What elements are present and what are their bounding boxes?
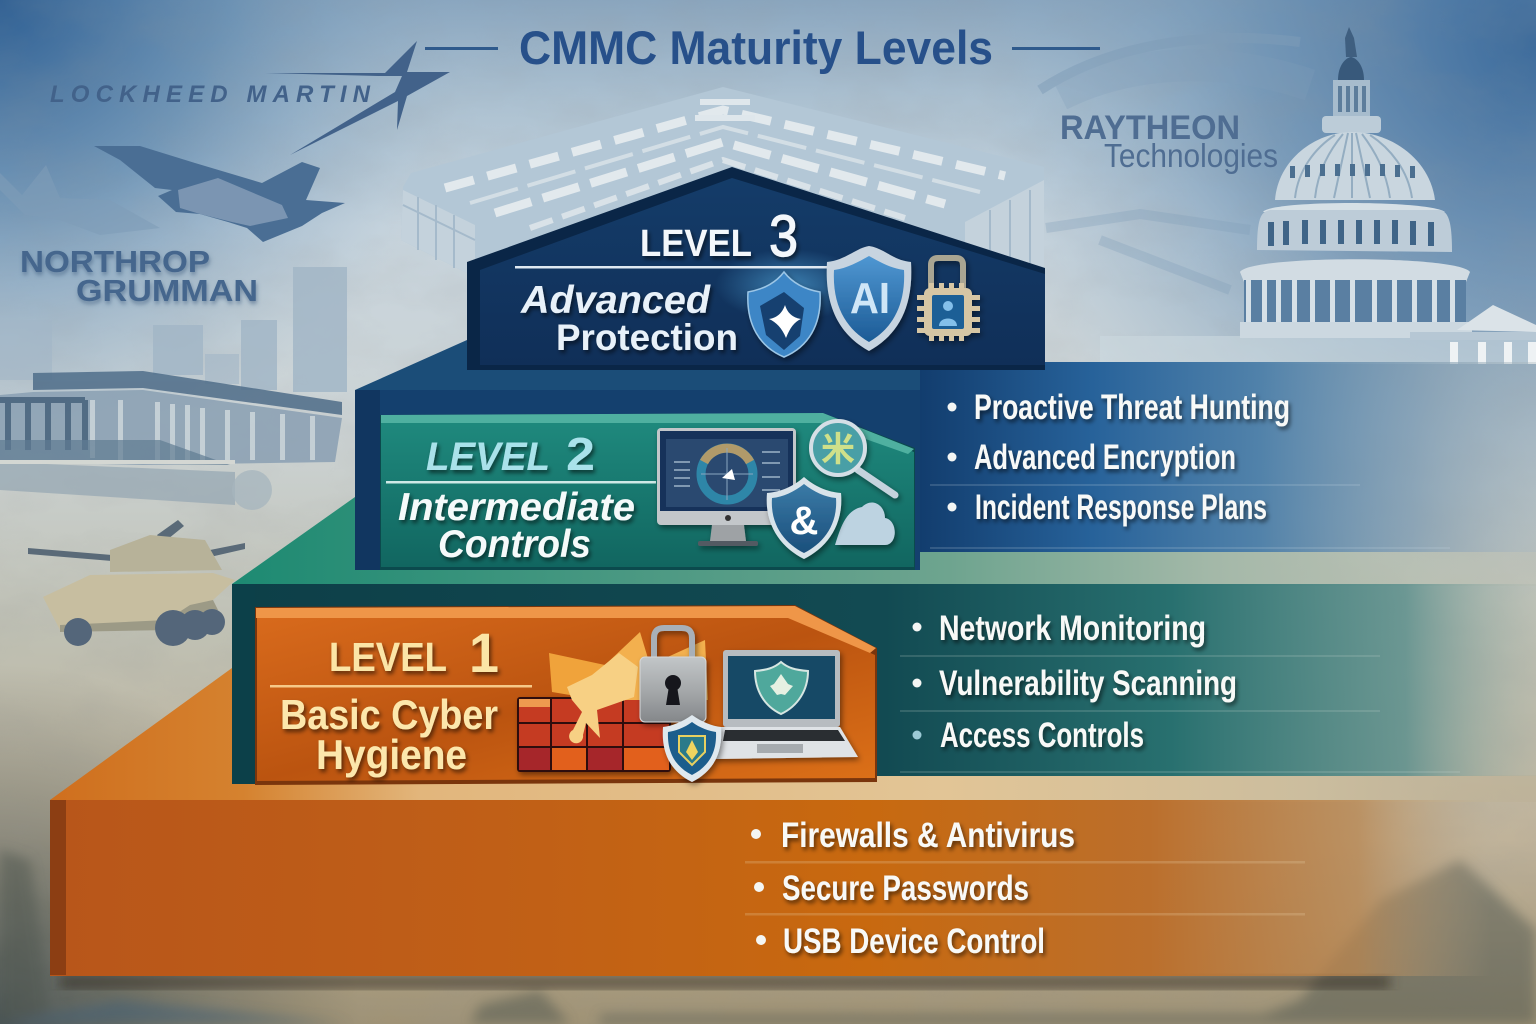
icon: laptop (710, 650, 858, 759)
level 1 heading: LEVEL (329, 634, 447, 680)
level 2 heading: 2 (566, 428, 595, 480)
icon: padlock (640, 628, 706, 722)
tier 2 block: teal step (232, 497, 1536, 784)
background: fighter jet (94, 146, 345, 242)
background: left city skyline (0, 267, 347, 392)
icon: AI shield (827, 246, 911, 351)
background: tank (28, 520, 245, 646)
list: level 1 controls: USB Device Control (783, 922, 1045, 961)
icon: magnifier: 米 (821, 431, 855, 469)
list: level 1 controls (751, 816, 1075, 961)
logo: Raytheon Technologies (1060, 109, 1278, 174)
level 2 heading: LEVEL (426, 435, 550, 479)
logo: Lockheed Martin: LOCKHEED MARTIN (50, 81, 371, 108)
icon: monitor dashboard (657, 428, 796, 546)
level 3 heading (640, 204, 798, 269)
logo: Northrop Grumman: GRUMMAN (76, 273, 258, 308)
level 1 name: Hygiene (316, 731, 467, 778)
tier 3 block: navy step (355, 340, 1536, 570)
logo: Northrop Grumman (20, 244, 258, 308)
logo: Raytheon Technologies: Technologies (1104, 137, 1278, 174)
background: capitol dome (1100, 27, 1536, 364)
level 2 name: Intermediate (398, 486, 635, 529)
icon: magnifier (811, 421, 895, 495)
list: level 1 controls: Firewalls & Antivirus (781, 816, 1075, 855)
list: level 2 controls: Access Controls (940, 716, 1144, 755)
icon: ampersand shield (767, 477, 841, 559)
list: level 2 controls: Network Monitoring (939, 609, 1206, 648)
list: level 2 controls (912, 609, 1237, 755)
tier 1 block: base orange step (50, 668, 1536, 989)
level 2 name: Controls (438, 523, 591, 566)
level 1 name (280, 691, 498, 778)
background: pentagon building (401, 87, 1044, 277)
level 3 name: Protection (556, 317, 738, 358)
icon: cloud (835, 503, 895, 545)
icon: AI shield: AI (850, 274, 890, 323)
list: level 1 controls: Secure Passwords (782, 869, 1029, 908)
title: CMMC Maturity Levels (519, 21, 993, 74)
level 3 name (520, 279, 738, 358)
statue (1345, 27, 1357, 57)
level 2 name (398, 486, 635, 566)
logo: Lockheed Martin (50, 41, 450, 155)
background: lower ruins texture (0, 850, 1536, 1024)
list: level 3 controls: Proactive Threat Hunting (974, 388, 1290, 427)
level 1 heading (329, 621, 499, 684)
panel: level 1 basic cyber hygiene (255, 605, 877, 785)
logo: Northrop Grumman: NORTHROP (20, 244, 210, 279)
icon: hand silhouette (567, 653, 638, 743)
level 3 heading: 3 (769, 204, 798, 269)
list: level 3 controls (948, 388, 1290, 527)
level 1 heading: 1 (469, 621, 499, 684)
panel: level 2 intermediate controls (380, 413, 915, 570)
logo: Raytheon Technologies: RAYTHEON (1060, 109, 1240, 147)
list: level 3 controls: Advanced Encryption (974, 438, 1236, 477)
level 3 name: Advanced (520, 279, 711, 322)
icon: faceted shield (748, 272, 820, 357)
icon: brick firewall (517, 697, 671, 772)
icon: ampersand shield: & (790, 499, 818, 543)
list: level 2 controls: Vulnerability Scanning (939, 664, 1237, 703)
background: ghost helicopter (0, 165, 160, 235)
background: faint arcs near Raytheon (1040, 38, 1310, 290)
level 2 heading (426, 428, 595, 480)
icon: chip lock (917, 258, 980, 341)
level 1 name: Basic Cyber (280, 691, 498, 738)
background: capital building (0, 371, 342, 510)
level 3 heading: LEVEL (640, 223, 752, 265)
panel: level 3 advanced protection (467, 167, 1045, 370)
icon: small shield (663, 715, 721, 782)
list: level 3 controls: Incident Response Plans (975, 488, 1267, 527)
icon: bow ribbon (549, 632, 708, 700)
